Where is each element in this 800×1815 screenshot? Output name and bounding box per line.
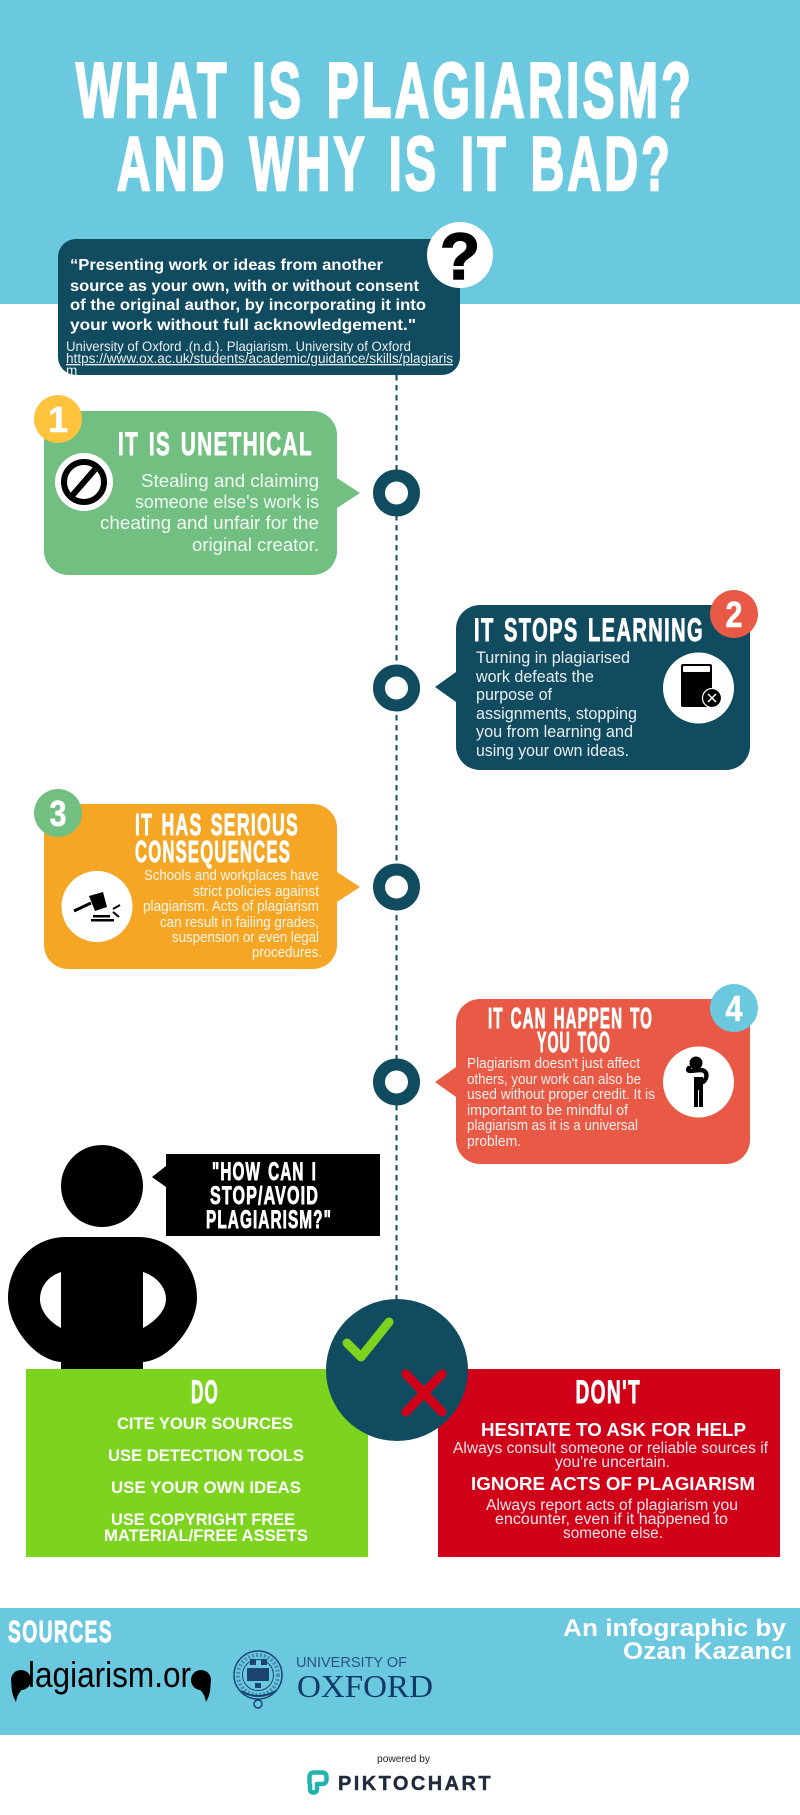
body text (467, 1056, 655, 1150)
panel: don't (438, 1369, 780, 1557)
footer band (0, 1608, 800, 1735)
speech bubble: PLAGIARISM?" (206, 1206, 332, 1234)
don't item 1 (453, 1419, 769, 1471)
body text (475, 649, 637, 760)
body text: can result in failing grades, (160, 915, 319, 931)
heading: DON'T (576, 1374, 641, 1410)
panel: it can happen to you too (435, 984, 758, 1164)
logo: university of oxford: OXFORD (297, 1668, 433, 1704)
panel: it stops learning (435, 590, 758, 770)
body text: strict policies against (193, 884, 319, 900)
body text: procedures. (252, 945, 322, 961)
body text: others, your work can also be (467, 1072, 641, 1088)
quote text: “Presenting work or ideas from another (70, 257, 383, 274)
badge 1: 1 (48, 399, 68, 440)
icon: gavel (62, 871, 132, 942)
powered by piktochart: powered by (377, 1753, 431, 1765)
badge 3: 3 (50, 793, 66, 834)
do list: USE COPYRIGHT FREE (111, 1510, 295, 1529)
speech bubble: "HOW CAN I (212, 1158, 317, 1186)
speech bubble: STOP/AVOID (210, 1182, 319, 1210)
timeline node 3 (379, 870, 414, 904)
do list: MATERIAL/FREE ASSETS (104, 1526, 308, 1545)
do list: USE DETECTION TOOLS (108, 1446, 304, 1465)
do list (104, 1414, 308, 1545)
icon: check and cross circle (326, 1299, 468, 1441)
author credit: An infographic by (563, 1615, 787, 1642)
body text: used without proper credit. It is (467, 1087, 655, 1103)
badge 4: 4 (726, 988, 742, 1029)
badge 1 (34, 395, 82, 443)
header band (0, 0, 800, 304)
badge 2: 2 (726, 594, 742, 635)
logo: university of oxford (234, 1651, 433, 1708)
logo: university of oxford: UNIVERSITY OF (296, 1654, 407, 1671)
icon: question mark: ? (440, 219, 480, 293)
speech bubble (152, 1154, 380, 1236)
icon: person silhouette (8, 1145, 197, 1370)
author credit: Ozan Kazancı (623, 1638, 792, 1665)
panel: it has serious consequences (34, 789, 360, 969)
icon: question mark (427, 219, 493, 293)
don't item 1: you're uncertain. (555, 1454, 670, 1471)
don't item 2: IGNORE ACTS OF PLAGIARISM (471, 1473, 755, 1494)
don't item 2: Always report acts of plagiarism you (486, 1497, 738, 1514)
body text (100, 471, 319, 555)
citation: University of Oxford .(n.d.). Plagiarism. University of Oxford (66, 339, 411, 354)
body text: purpose of (476, 686, 552, 704)
don't item 1: HESITATE TO ASK FOR HELP (481, 1419, 746, 1440)
quote text: of the original author, by incorporating it into (70, 297, 426, 314)
heading: CONSEQUENCES (135, 834, 291, 869)
body text: plagiarism as it is a universal (467, 1118, 638, 1134)
body text: plagiarism. Acts of plagiarism (143, 899, 319, 915)
body text: Plagiarism doesn't just affect (467, 1056, 640, 1072)
don't item 2: encounter, even if it happened to (495, 1511, 728, 1528)
icon: prohibited (55, 453, 113, 511)
body text (143, 868, 322, 961)
don't item 2: someone else. (563, 1525, 663, 1542)
powered by piktochart (310, 1753, 493, 1795)
body text: work defeats the (475, 668, 594, 686)
quote text (70, 257, 426, 334)
do list: CITE YOUR SOURCES (117, 1414, 293, 1433)
heading (135, 807, 299, 869)
icon: book with cross (663, 652, 734, 724)
don't item 1: Always consult someone or reliable sources if (453, 1440, 769, 1457)
heading: IT HAS SERIOUS (135, 807, 299, 842)
timeline node 2 (379, 670, 414, 706)
body text: you from learning and (476, 723, 633, 741)
title (76, 46, 694, 207)
do list: USE YOUR OWN IDEAS (111, 1478, 301, 1497)
icon: thinking person (663, 1046, 734, 1118)
citation (66, 339, 453, 378)
heading: DO (191, 1374, 219, 1410)
panel: definition quote (58, 239, 460, 378)
citation: https://www.ox.ac.uk/students/academic/guidance/skills/plagiaris (66, 351, 453, 366)
body text: suspension or even legal (172, 930, 319, 946)
body text: Schools and workplaces have (144, 868, 319, 884)
body text: Turning in plagiarised (476, 649, 630, 667)
don't item 2 (471, 1473, 755, 1542)
body text: someone else's work is (135, 492, 319, 512)
panel: it is unethical (34, 395, 360, 575)
heading: IT CAN HAPPEN TO (488, 1003, 653, 1035)
heading: IT IS UNETHICAL (118, 426, 313, 462)
body text: cheating and unfair for the (100, 513, 319, 533)
citation: m (66, 363, 77, 378)
badge 2 (710, 590, 758, 638)
timeline dashed line (396, 375, 398, 1300)
heading (488, 1003, 653, 1059)
icon: piktochart logo (310, 1772, 326, 1792)
heading: YOU TOO (537, 1027, 611, 1059)
timeline node 4 (379, 1064, 414, 1100)
quote text: your work without full acknowledgement." (70, 317, 416, 334)
sources heading: SOURCES (8, 1614, 113, 1649)
badge 4 (710, 984, 758, 1032)
body text: using your own ideas. (476, 742, 629, 760)
quote text: source as your own, with or without consent (70, 278, 419, 295)
badge 3 (34, 789, 82, 837)
timeline node 1 (379, 476, 414, 510)
body text: original creator. (192, 535, 319, 555)
panel: do (26, 1369, 368, 1557)
logo: plagiarism.org: lagiarism.or (28, 1654, 191, 1695)
body text: problem. (467, 1134, 521, 1150)
author credit (563, 1615, 792, 1665)
powered by piktochart: PIKTOCHART (338, 1773, 493, 1795)
body text: important to be mindful of (467, 1103, 629, 1119)
body text: Stealing and claiming (141, 471, 319, 491)
body text: assignments, stopping (476, 705, 637, 723)
